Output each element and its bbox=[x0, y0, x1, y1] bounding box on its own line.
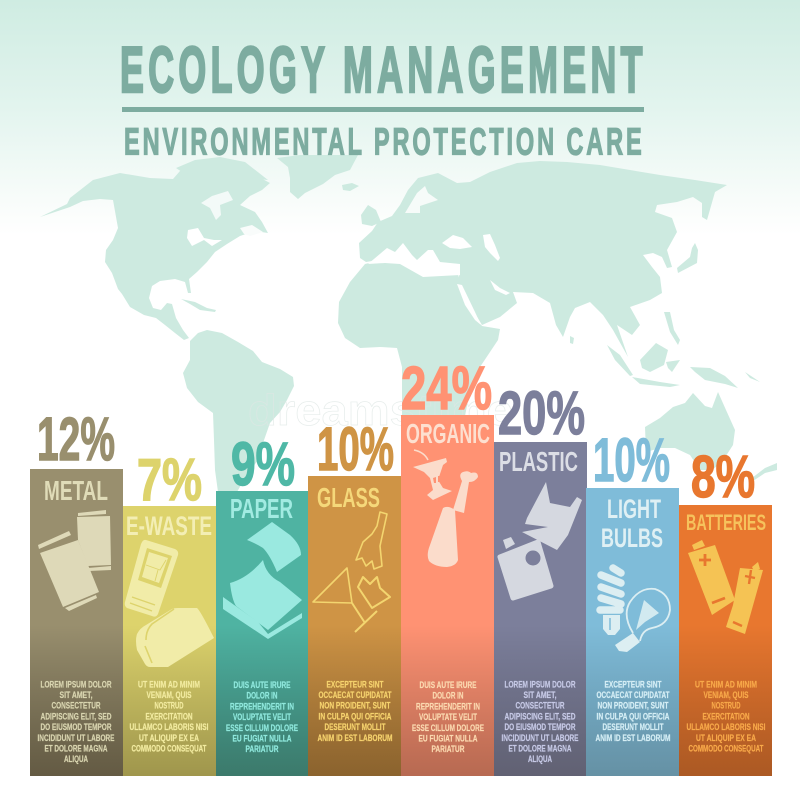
icon: broken phone and toaster bbox=[125, 540, 214, 667]
paper text: EU FUGIAT NULLA bbox=[232, 734, 292, 744]
batteries text: UT ENIM AD MINIM bbox=[695, 679, 757, 689]
plastic text: ADIPISCING ELIT, SED bbox=[504, 711, 576, 721]
metal percent: 12% bbox=[37, 405, 115, 473]
organic label: ORGANIC bbox=[406, 418, 490, 449]
light bulbs text bbox=[596, 679, 670, 743]
metal text: SIT AMET, bbox=[60, 690, 92, 700]
organic text: DOLOR IN bbox=[432, 691, 464, 701]
red sea bbox=[457, 284, 481, 325]
metal label: METAL bbox=[44, 475, 108, 506]
e-waste text: ULLAMCO LABORIS NISI bbox=[130, 722, 208, 732]
paper text: DUIS AUTE IRURE bbox=[234, 680, 290, 690]
batteries text: EXERCITATION bbox=[702, 711, 750, 721]
e-waste text: EXERCITATION bbox=[146, 711, 192, 721]
baltic bbox=[405, 186, 438, 213]
glass text: NON PROIDENT, SUNT bbox=[320, 701, 391, 711]
uk bbox=[361, 205, 381, 226]
panel: plastic bbox=[494, 379, 587, 776]
new guinea bbox=[690, 367, 760, 388]
glass label: GLASS bbox=[317, 482, 380, 513]
paper percent: 9% bbox=[231, 430, 295, 498]
light bulbs label bbox=[601, 494, 663, 553]
plastic text: LOREM IPSUM DOLOR bbox=[504, 679, 576, 689]
caspian sea bbox=[483, 234, 500, 261]
light bulbs text: OCCAECAT CUPIDATAT bbox=[596, 690, 670, 700]
batteries percent: 8% bbox=[691, 444, 755, 510]
glass text: OCCAECAT CUPIDATAT bbox=[318, 690, 392, 700]
batteries text: UT ALIQUIP EX EA bbox=[696, 733, 756, 743]
light bulbs text: EXCEPTEUR SINT bbox=[604, 679, 662, 689]
world map bbox=[40, 155, 777, 492]
eurasia bbox=[359, 161, 727, 357]
black sea bbox=[442, 235, 472, 249]
organic text: DUIS AUTE IRURE bbox=[420, 680, 476, 690]
paper text: ESSE CILLUM DOLORE bbox=[226, 723, 298, 733]
panel: metal bbox=[30, 405, 123, 776]
light bulbs label: LIGHT bbox=[607, 494, 661, 524]
persian gulf bbox=[490, 280, 510, 295]
e-waste text: VENIAM, QUIS bbox=[146, 690, 192, 700]
organic percent: 24% bbox=[401, 354, 492, 422]
glass percent: 10% bbox=[317, 415, 394, 483]
paper text: VOLUPTATE VELIT bbox=[233, 712, 291, 722]
plastic text: INCIDIDUNT UT LABORE bbox=[502, 733, 578, 743]
e-waste text: NOSTRUD bbox=[154, 701, 184, 711]
icon: cans bbox=[38, 510, 111, 611]
africa bbox=[338, 260, 500, 416]
glass text: ANIM ID EST LABORUM bbox=[318, 733, 392, 743]
borneo bbox=[640, 343, 668, 372]
organic text: PARIATUR bbox=[432, 744, 465, 754]
icon: batteries bbox=[688, 540, 763, 634]
e-waste percent: 7% bbox=[137, 447, 202, 513]
sri lanka bbox=[570, 336, 574, 344]
metal text: ET DOLORE MAGNA bbox=[44, 744, 108, 754]
icon: paper sheets bbox=[223, 522, 302, 639]
e-waste text: COMMODO CONSEQUAT bbox=[132, 744, 207, 754]
great lakes bbox=[187, 228, 222, 246]
batteries text: NOSTRUD bbox=[712, 701, 741, 711]
arctic islands bbox=[176, 157, 268, 180]
north america bbox=[40, 165, 270, 340]
subtitle: ENVIRONMENTAL PROTECTION CARE bbox=[124, 120, 642, 163]
watermark: dreamstime bbox=[248, 386, 513, 435]
gulf of st lawrence bbox=[240, 225, 263, 236]
plastic text: ET DOLORE MAGNA bbox=[508, 744, 572, 754]
batteries text: COMMODO CONSEQUAT bbox=[688, 744, 764, 754]
light bulbs percent: 10% bbox=[593, 426, 670, 494]
batteries text bbox=[686, 679, 766, 754]
glass text: DESERUNT MOLLIT bbox=[324, 722, 386, 732]
plastic percent: 20% bbox=[498, 379, 585, 447]
panel: batteries bbox=[679, 444, 772, 776]
organic text: EU FUGIAT NULLA bbox=[418, 734, 478, 744]
icon: plastic bag and bottle bbox=[500, 482, 582, 598]
sulawesi bbox=[666, 360, 680, 372]
icon: light bulbs bbox=[600, 568, 670, 652]
hudson bay bbox=[201, 191, 233, 220]
organic text bbox=[412, 680, 484, 754]
light bulbs text: NON PROIDENT, SUNT bbox=[598, 701, 669, 711]
glass text bbox=[318, 679, 392, 743]
philippines bbox=[664, 312, 680, 345]
metal text: DO EIUSMOD TEMPOR bbox=[40, 722, 112, 732]
panel: light bulbs bbox=[586, 426, 679, 776]
metal text: ALIQUA bbox=[64, 754, 88, 764]
greenland bbox=[277, 155, 358, 199]
e-waste text bbox=[130, 679, 208, 754]
metal text bbox=[38, 679, 114, 764]
batteries text: ULLAMCO LABORIS NISI bbox=[686, 722, 766, 732]
iceland bbox=[342, 183, 359, 191]
metal text: CONSECTETUR bbox=[52, 701, 101, 711]
metal text: INCIDIDUNT UT LABORE bbox=[38, 733, 114, 743]
glass text: EXCEPTEUR SINT bbox=[326, 679, 384, 689]
batteries text: VENIAM, QUIS bbox=[704, 690, 748, 700]
organic text: REPREHENDERIT IN bbox=[416, 701, 480, 711]
plastic text bbox=[502, 679, 578, 764]
organic text: VOLUPTATE VELIT bbox=[419, 712, 477, 722]
e-waste text: UT ALIQUIP EX EA bbox=[139, 733, 199, 743]
mediterranean bbox=[368, 243, 460, 277]
plastic text: DO EIUSMOD TEMPOR bbox=[504, 722, 576, 732]
e-waste text: UT ENIM AD MINIM bbox=[138, 679, 200, 689]
australia bbox=[645, 392, 735, 470]
plastic text: ALIQUA bbox=[528, 754, 552, 764]
title: ECOLOGY MANAGEMENT bbox=[120, 35, 643, 107]
japan bbox=[677, 243, 698, 273]
organic text: ESSE CILLUM DOLORE bbox=[412, 723, 484, 733]
south america bbox=[183, 330, 294, 492]
panel: e-waste bbox=[123, 447, 216, 776]
panel: paper bbox=[216, 430, 309, 776]
title rule bbox=[122, 107, 644, 112]
glass text: IN CULPA QUI OFFICIA bbox=[318, 711, 392, 721]
light bulbs text: DESERUNT MOLLIT bbox=[602, 722, 664, 732]
paper label: PAPER bbox=[230, 493, 293, 524]
plastic text: SIT AMET, bbox=[524, 690, 556, 700]
plastic text: CONSECTETUR bbox=[516, 701, 565, 711]
icon: broken glass bbox=[313, 512, 390, 632]
paper text bbox=[226, 680, 298, 754]
caribbean islands bbox=[181, 299, 216, 312]
metal text: ADIPISCING ELIT, SED bbox=[40, 711, 112, 721]
new zealand bbox=[752, 463, 777, 481]
paper text: DOLOR IN bbox=[246, 691, 278, 701]
metal text: LOREM IPSUM DOLOR bbox=[40, 679, 112, 689]
icon: apple core and drumstick bbox=[413, 450, 478, 567]
sumatra java bbox=[607, 345, 680, 387]
panel: glass bbox=[308, 415, 401, 776]
paper text: REPREHENDERIT IN bbox=[230, 701, 294, 711]
light bulbs text: IN CULPA QUI OFFICIA bbox=[596, 711, 670, 721]
light bulbs text: ANIM ID EST LABORUM bbox=[596, 733, 670, 743]
paper text: PARIATUR bbox=[246, 744, 279, 754]
light bulbs label: BULBS bbox=[601, 523, 663, 553]
e-waste label: E-WASTE bbox=[126, 511, 212, 541]
plastic label: PLASTIC bbox=[499, 446, 578, 477]
panel: organic bbox=[401, 354, 494, 776]
